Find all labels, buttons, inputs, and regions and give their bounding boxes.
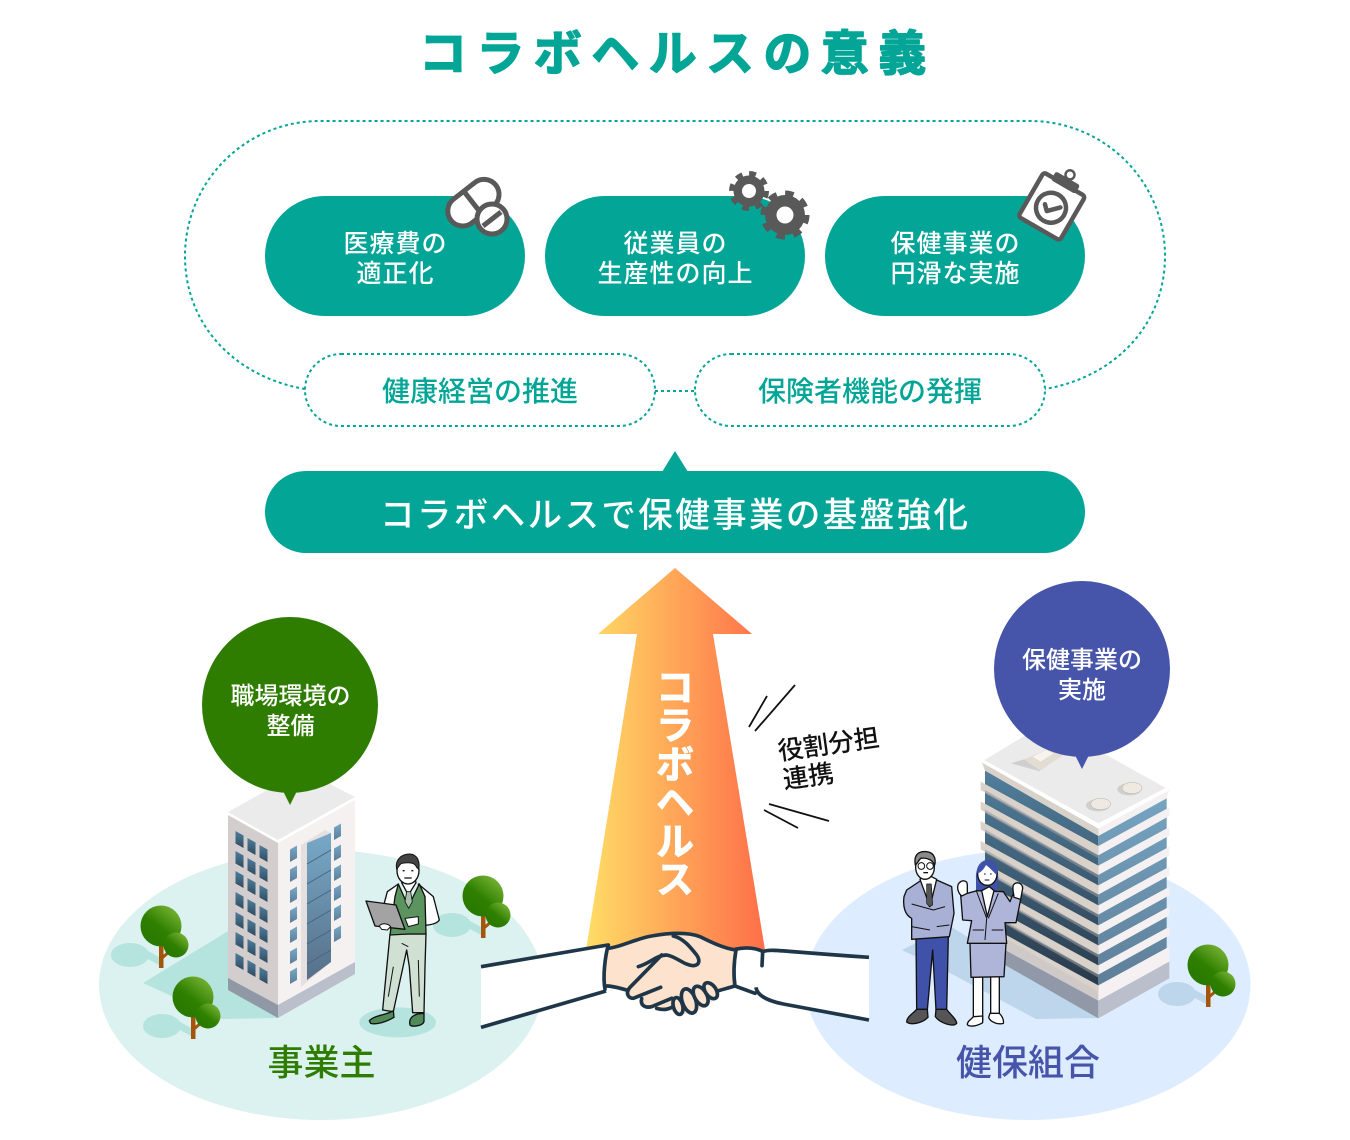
speech bubble: workplace environment xyxy=(202,617,378,805)
banner: strengthening foundation with arrow notch xyxy=(265,451,1085,553)
dashed pill: insurer function: 保険者機能の発揮 xyxy=(758,376,982,407)
trees: employer xyxy=(140,876,510,1039)
pill: employee productivity xyxy=(545,196,805,316)
tree shadows: employer xyxy=(111,913,483,1038)
accent lines: top xyxy=(749,685,795,731)
gradient arrow xyxy=(586,568,765,950)
dashed pill: insurer function xyxy=(695,354,1045,426)
icon: gears xyxy=(732,174,806,236)
handshake xyxy=(481,933,869,1027)
left sleeve xyxy=(481,945,608,1027)
pill: smooth implementation of health programs: 保健事業の xyxy=(890,230,1021,258)
speech bubble: implementation of health programs: 保健事業の xyxy=(1022,647,1142,674)
callout: roles and cooperation: 役割分担 xyxy=(776,724,881,766)
banner: strengthening foundation with arrow notch: コラボヘルスで保健事業の基盤強化 xyxy=(380,497,970,535)
pill: employee productivity: 生産性の向上 xyxy=(597,260,754,288)
speech bubble: implementation of health programs: 実施 xyxy=(1058,677,1106,704)
employer scene xyxy=(111,617,510,1083)
pill: medical cost optimization: 医療費の xyxy=(343,230,448,258)
dotted outline: significance area xyxy=(185,121,1165,391)
pill: medical cost optimization: 適正化 xyxy=(356,260,435,288)
left ground ellipse xyxy=(99,850,543,1120)
dashed pill: promoting health management xyxy=(305,354,655,426)
dashed pill: promoting health management: 健康経営の推進 xyxy=(382,376,578,407)
pill: employee productivity: 従業員の xyxy=(623,230,728,258)
icon: capsule and pill xyxy=(442,173,507,234)
pill: smooth implementation of health programs: 円滑な実施 xyxy=(890,260,1021,288)
person: woman with raised fists xyxy=(958,860,1023,1026)
label: health insurance society: 健保組合 xyxy=(956,1042,1100,1083)
ground shadow: employer building xyxy=(143,930,290,1019)
tree: society xyxy=(1188,944,1236,1007)
callout: roles and cooperation xyxy=(776,724,885,795)
person: employee with laptop xyxy=(359,854,439,1037)
callout: roles and cooperation: 連携 xyxy=(781,760,836,795)
employer building xyxy=(228,770,355,1018)
society building xyxy=(981,722,1169,1018)
person: executive with crossed arms xyxy=(904,852,957,1025)
label: employer: 事業主 xyxy=(267,1042,376,1083)
speech bubble: workplace environment: 整備 xyxy=(266,713,314,740)
icon: clipboard with check xyxy=(1018,159,1093,241)
health insurance society scene xyxy=(902,581,1236,1083)
right ground ellipse xyxy=(806,850,1250,1120)
accent lines: bottom xyxy=(764,804,829,828)
tree shadow: society xyxy=(1158,982,1208,1006)
title: コラボヘルスの意義 xyxy=(419,28,936,81)
arrow label: コラボヘルス xyxy=(656,668,694,902)
speech bubble: implementation of health programs xyxy=(994,581,1170,769)
pill: medical cost optimization xyxy=(265,196,525,316)
ground shadow: society building xyxy=(902,926,1098,1019)
speech bubble: workplace environment: 職場環境の xyxy=(230,683,350,710)
pill: smooth implementation of health programs xyxy=(825,196,1085,316)
